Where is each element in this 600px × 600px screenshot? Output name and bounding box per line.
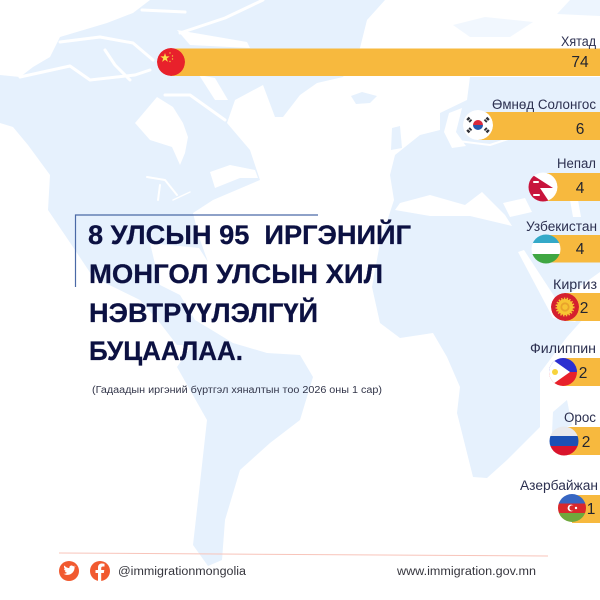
title: БУЦААЛАА. xyxy=(89,336,243,366)
subtitle note: (Гадаадын иргэний бүртгэл хяналтын тоо 2026 оны 1 сар) xyxy=(92,384,382,396)
flag: Russia xyxy=(549,426,579,456)
title xyxy=(88,219,411,366)
bar: Kyrgyzstan 2: Киргиз xyxy=(553,277,597,292)
bar: South Korea 6: 6 xyxy=(576,121,584,138)
icon: twitter xyxy=(59,561,79,581)
bar: China 74 xyxy=(157,34,600,76)
flag: China xyxy=(157,48,185,76)
website: www.immigration.gov.mn xyxy=(396,566,536,578)
map: british isles xyxy=(391,126,402,150)
bar: South Korea 6: Өмнөд Солонгос xyxy=(492,97,596,112)
bar: Russia 2: Орос xyxy=(564,410,596,425)
bar: Russia 2 xyxy=(549,410,600,456)
flag: Kyrgyzstan xyxy=(551,293,579,321)
flag: South Korea xyxy=(463,110,493,140)
title: МОНГОЛ УЛСЫН ХИЛ xyxy=(89,259,383,289)
bar: China 74: Хятад xyxy=(561,34,596,49)
bar: Nepal 4: Непал xyxy=(557,156,596,171)
bar: Philippines 2: Филиппин xyxy=(530,341,596,356)
bar: Kyrgyzstan 2: 2 xyxy=(580,300,588,317)
title: НЭВТРҮҮЛЭЛГҮЙ xyxy=(89,297,318,328)
icon: facebook xyxy=(90,561,110,581)
social handle: @immigrationmongolia xyxy=(118,566,247,578)
map: channels xyxy=(20,0,520,200)
map: iceland xyxy=(351,92,377,104)
bar: Nepal 4 xyxy=(528,156,600,203)
bar: Azerbaijan 1: Азербайжан xyxy=(520,478,598,493)
bar: Philippines 2: 2 xyxy=(579,365,587,382)
bar: Philippines 2 xyxy=(530,344,600,386)
title: 8 УЛСЫН 95 ИРГЭНИЙГ xyxy=(88,219,411,250)
flag: Azerbaijan xyxy=(558,494,586,522)
bar: Russia 2: 2 xyxy=(582,434,590,451)
map: seas xyxy=(135,30,600,322)
bar: Kyrgyzstan 2 xyxy=(551,277,600,321)
map: americas and greenland xyxy=(0,0,385,566)
flag: Uzbekistan xyxy=(531,234,561,265)
bar: China 74: 74 xyxy=(571,54,589,71)
flag: Philippines xyxy=(549,358,577,386)
bar: Uzbekistan 4: 4 xyxy=(576,241,585,258)
map: arctic russia xyxy=(453,17,533,37)
footer divider xyxy=(59,553,548,556)
title frame xyxy=(76,215,318,287)
bar: Uzbekistan 4 xyxy=(526,219,600,265)
map: madagascar xyxy=(552,400,572,433)
flag: Nepal xyxy=(528,172,558,203)
bar: Azerbaijan 1 xyxy=(520,478,600,523)
bar: Azerbaijan 1: 1 xyxy=(587,501,595,518)
bar: Uzbekistan 4: Узбекистан xyxy=(526,219,597,234)
map: eurasia and africa xyxy=(372,77,600,478)
bar: Nepal 4: 4 xyxy=(576,180,585,197)
map: far north xyxy=(557,0,600,16)
bar: South Korea 6 xyxy=(463,97,600,140)
